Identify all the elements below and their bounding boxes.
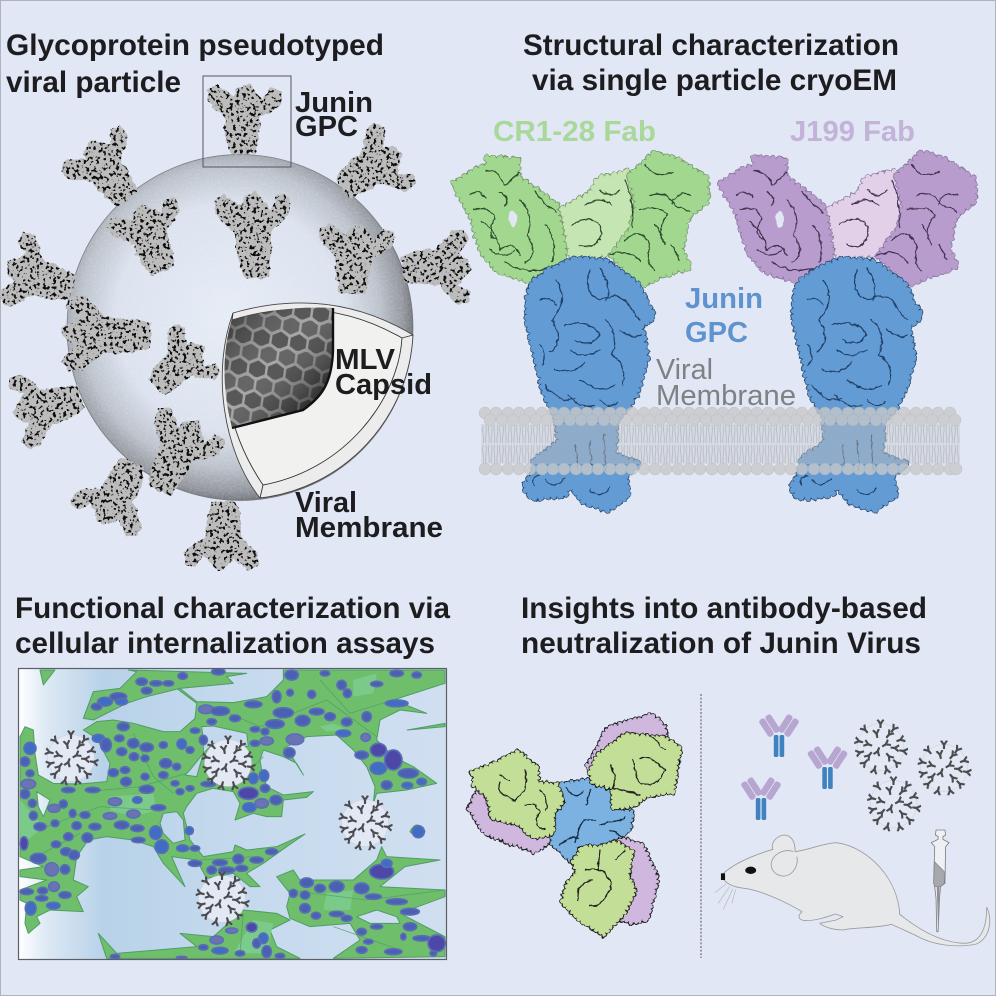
- green cell network: [20, 670, 445, 958]
- mouse whiskers: [715, 884, 736, 909]
- panel: antibody-based neutralization insights: [469, 592, 990, 958]
- label: Viral Membrane: Viral: [295, 487, 357, 519]
- heading: functional characterization: cellular internalization assays: [15, 627, 435, 660]
- cutaway of the viral membrane: [222, 303, 413, 498]
- label: Junin GPC (blue): GPC: [685, 317, 748, 349]
- dotted divider: [700, 694, 702, 958]
- structure: GPC with CR1-28 Fab: [453, 153, 707, 510]
- label: J199 Fab: J199 Fab: [790, 116, 915, 148]
- glycoprotein spikes around and on the particle: [0, 85, 474, 570]
- lighter cytoplasm patches: [20, 673, 377, 953]
- heading: glycoprotein pseudotyped viral particle: Glycoprotein pseudotyped: [6, 29, 384, 62]
- Fab hole: [509, 211, 517, 227]
- label: MLV Capsid: Capsid: [335, 369, 432, 401]
- mouse eye: [745, 867, 756, 874]
- heading: antibody-based neutralization: Insights into antibody-based: [521, 592, 927, 625]
- antibodies: [740, 713, 848, 820]
- heading: glycoprotein pseudotyped viral particle: viral particle: [6, 66, 181, 99]
- label: MLV Capsid: MLV: [335, 344, 395, 376]
- inset box around Junin GPC: [203, 76, 291, 167]
- mouse nose: [721, 873, 725, 880]
- cell nuclei: [20, 668, 445, 959]
- viral membrane bilayer: [479, 407, 962, 475]
- heading: functional characterization: Functional characterization via: [15, 592, 450, 625]
- label: Junin GPC: GPC: [295, 111, 358, 143]
- heading: functional characterization: [15, 592, 450, 660]
- heading: antibody-based neutralization: [521, 592, 927, 660]
- mouse body and tail: [722, 835, 990, 946]
- mouse: [715, 835, 990, 946]
- micrograph frame: [18, 668, 446, 960]
- label: CR1-28 Fab: CR1-28 Fab: [493, 116, 656, 148]
- panel: structural characterization: [453, 29, 974, 510]
- label: Viral Membrane: [295, 487, 443, 544]
- mouse ear: [771, 851, 797, 876]
- viral particle sphere: [67, 154, 413, 500]
- syringe: [931, 830, 949, 932]
- label: Junin GPC: Junin: [295, 87, 373, 119]
- trimer top-down structure: [469, 715, 680, 935]
- label: Junin GPC: [295, 87, 373, 143]
- label: Viral Membrane (grey): [656, 354, 796, 412]
- label: Viral Membrane (grey): Viral: [656, 354, 713, 386]
- blue GPC core: [552, 780, 633, 862]
- Fab hole: [776, 211, 784, 227]
- heading: structural characterization: Structural characterization: [523, 29, 899, 62]
- panel: glycoprotein pseudotyped viral particle: [0, 29, 474, 570]
- MLV capsid: [224, 308, 333, 428]
- cell boundary strokes: [30, 680, 445, 953]
- label: Viral Membrane: Membrane: [295, 512, 443, 544]
- virions over cells: [44, 730, 393, 927]
- panel: functional characterization: [15, 592, 450, 960]
- virus particles: [854, 719, 972, 832]
- structure: GPC with J199 Fab: [720, 153, 974, 510]
- cell micrograph illustration: [19, 669, 446, 959]
- green Fab lobes: [472, 735, 680, 935]
- heading: structural characterization: [523, 29, 899, 97]
- heading: structural characterization: via single particle cryoEM: [532, 64, 897, 97]
- label: Junin GPC (blue): [685, 283, 763, 349]
- label: Viral Membrane (grey): Membrane: [656, 380, 796, 412]
- purple Fab lobes: [469, 715, 665, 923]
- label: MLV Capsid: [335, 344, 432, 401]
- heading: antibody-based neutralization: neutralization of Junin Virus: [521, 627, 921, 660]
- heading: glycoprotein pseudotyped viral particle: [6, 29, 384, 99]
- label: Junin GPC (blue): Junin: [685, 283, 763, 315]
